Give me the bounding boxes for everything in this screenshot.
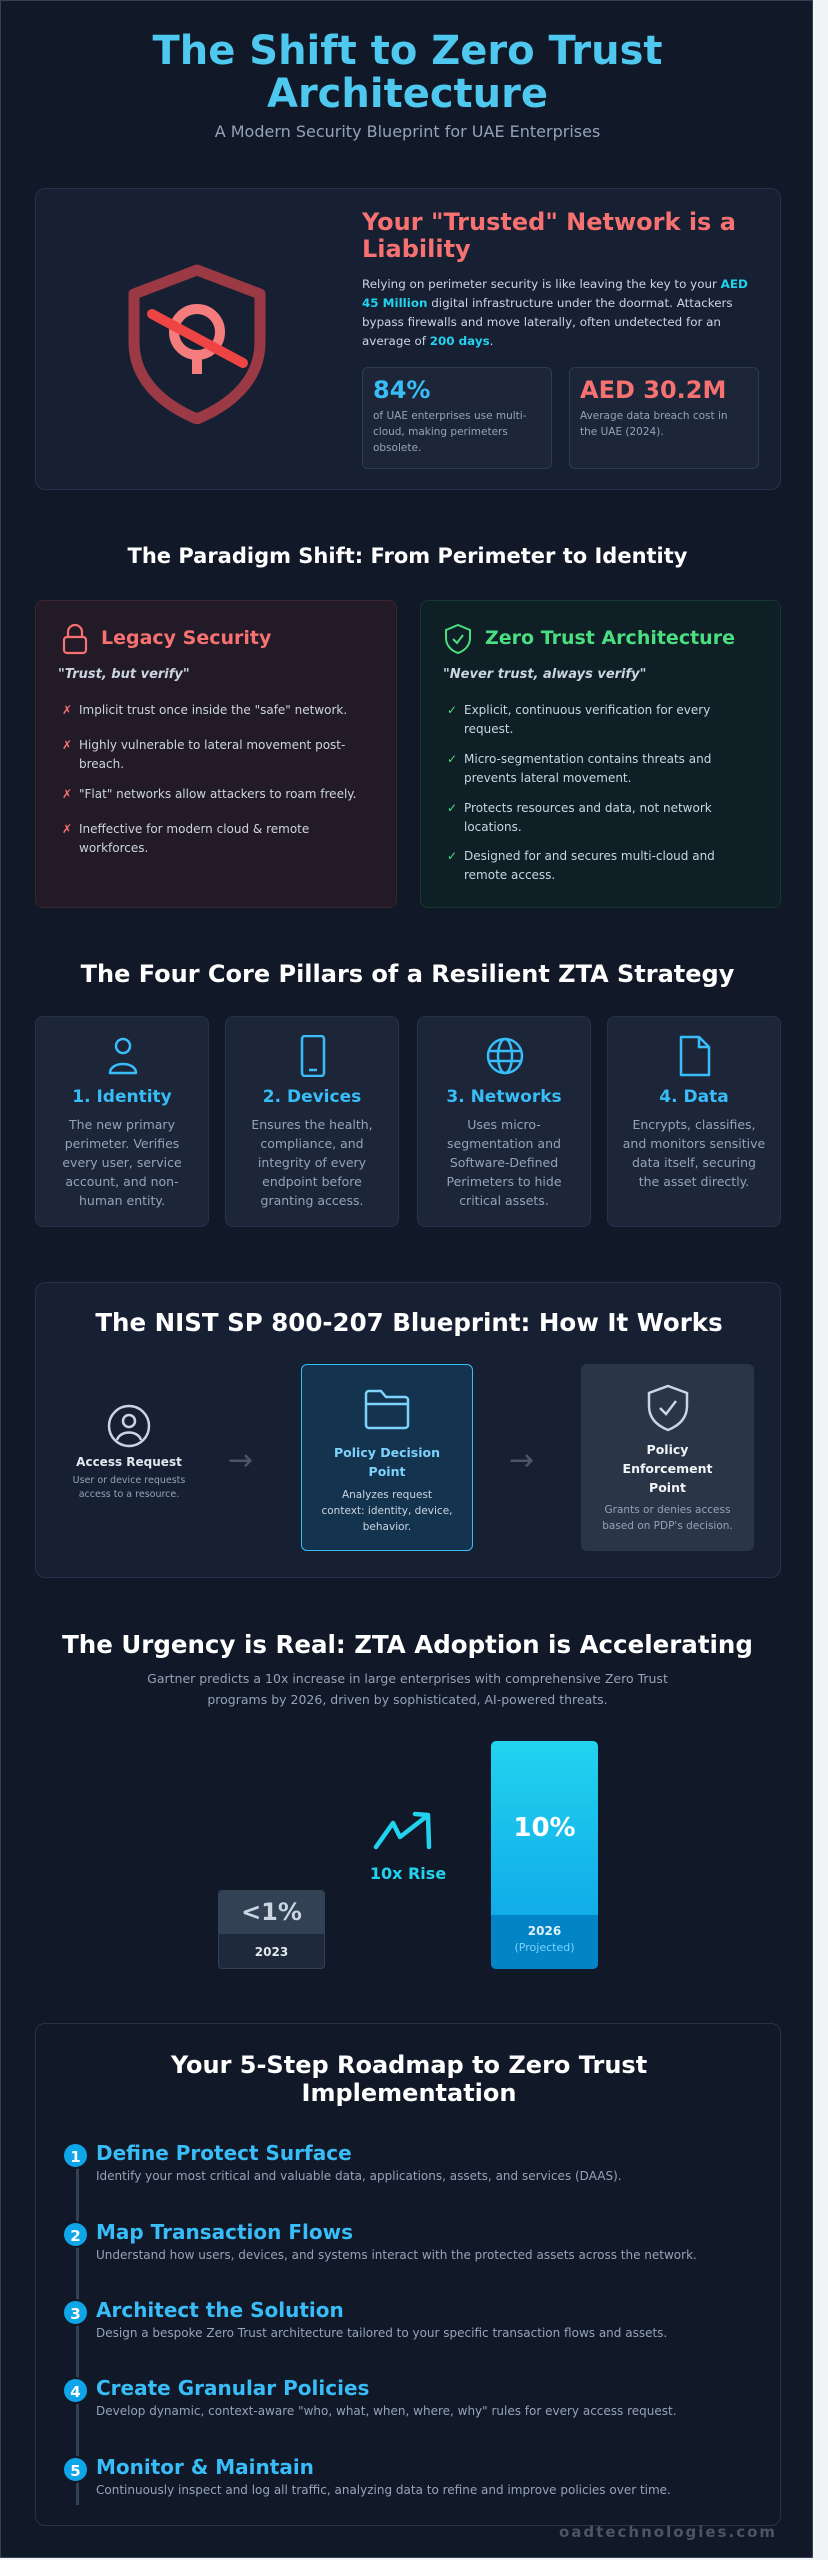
title: The Shift to Zero Trust: [152, 28, 663, 74]
panel: liability: [35, 188, 781, 490]
subtitle: A Modern Security Blueprint for UAE Enterprises: [215, 122, 600, 141]
icon: phone: [300, 1035, 326, 1077]
step 4: 4: [70, 2383, 81, 2401]
icon: broken shield key: [128, 264, 266, 424]
icon: user circle: [108, 1404, 150, 1448]
step: access request: User or device requests: [73, 1475, 185, 1486]
box: policy enforcement point: Grants or denies access: [605, 1504, 730, 1516]
icon: person: [108, 1038, 138, 1074]
step: access request: Access Request: [76, 1455, 182, 1469]
stat: 84%: 84%: [373, 376, 430, 404]
panel: roadmap: Define Protect Surface: [96, 2141, 352, 2165]
pillar: networks: 3. Networks: [446, 1087, 562, 1107]
step: access request: access to a resource.: [79, 1489, 179, 1500]
heading: urgency: The Urgency is Real: ZTA Adoption is Accelerating: [62, 1630, 753, 1659]
pillar: devices: Ensures the health, compliance, and integrity of every endpoint before granting access.: [251, 1117, 373, 1208]
label: 10x rise: 10x Rise: [370, 1864, 446, 1883]
box: policy decision point: Point: [369, 1464, 405, 1479]
pillar: identity: [35, 1016, 209, 1227]
heading: four pillars: The Four Core Pillars of a Resilient ZTA Strategy: [81, 960, 734, 988]
pillar: networks: Uses micro-segmentation and Software-Defined Perimeters to hide critical assets.: [446, 1117, 562, 1208]
panel: zero trust: Designed for and secures multi-cloud and remote access.: [464, 849, 715, 882]
box: policy decision point: context: identity, device,: [321, 1505, 452, 1517]
body text: Relying on perimeter security is like leaving the key to your AED 45 Million digital infrastructure under the doormat. Attackers bypass firewalls and move laterally, often undetected for an average of 200 days.: [362, 277, 748, 348]
arrow 2: →: [509, 1443, 534, 1478]
roadmap heading: [170, 2051, 647, 2107]
step 2: 2: [70, 2227, 81, 2245]
pillar: networks: [417, 1016, 591, 1227]
step 1: [64, 2141, 622, 2183]
bar: 2026: [491, 1741, 598, 1969]
panel: roadmap: [35, 2023, 781, 2526]
panel: legacy security: ✗: [62, 822, 72, 836]
pillar: identity: The new primary perimeter. Verifies every user, service account, and non-human entity.: [62, 1117, 182, 1208]
panel: roadmap: Architect the Solution: [96, 2298, 344, 2322]
bar: 2023: 2023: [255, 1945, 288, 1959]
step 2: Understand how users, devices, and systems interact with the protected assets across the network.: [96, 2248, 697, 2262]
icon: document: [680, 1036, 710, 1076]
pillar: data: [607, 1016, 781, 1227]
watermark: oadtechnologies.com: [559, 2523, 777, 2541]
bar: 2023: [218, 1890, 325, 1969]
roadmap heading: Implementation: [302, 2079, 516, 2107]
box: policy enforcement point: Point: [649, 1480, 686, 1495]
step 5: [64, 2455, 671, 2497]
panel: roadmap: Create Granular Policies: [96, 2376, 369, 2400]
panel: legacy security: Ineffective for modern cloud & remote workforces.: [79, 822, 309, 855]
box: policy enforcement point: based on PDP's decision.: [602, 1520, 733, 1532]
step 2: [64, 2220, 697, 2262]
panel: legacy security: Highly vulnerable to lateral movement post-breach.: [79, 738, 345, 771]
stat: AED 30.2M: Average data breach cost in the UAE (2024).: [580, 410, 728, 438]
panel: zero trust: ✓: [447, 849, 457, 863]
zt title: Zero Trust Architecture: [485, 627, 735, 649]
step 1: Identify your most critical and valuable data, applications, assets, and services (DAAS).: [96, 2169, 622, 2183]
box: policy enforcement point: Policy: [647, 1442, 688, 1457]
panel: legacy security: ✗: [62, 787, 72, 801]
icon: folder: [364, 1390, 410, 1430]
stat: AED 30.2M: AED 30.2M: [580, 376, 726, 404]
pillar: identity: 1. Identity: [72, 1087, 172, 1107]
step 5: 5: [70, 2462, 81, 2480]
panel: zero trust: [420, 600, 781, 908]
panel: legacy security: ✗: [62, 738, 72, 752]
step: access request: [73, 1404, 185, 1500]
panel: zero trust: Protects resources and data, not network locations.: [464, 801, 712, 834]
bar chart: [218, 1741, 598, 1969]
arrow 1: →: [228, 1443, 253, 1478]
title: [152, 28, 663, 117]
bar: 2026: (Projected): [515, 1941, 574, 1954]
icon: globe: [486, 1038, 524, 1074]
panel: zero trust: Micro-segmentation contains threats and prevents lateral movement.: [464, 752, 711, 785]
icon: shield check: [648, 1384, 688, 1432]
box: policy enforcement point: Enforcement: [623, 1461, 712, 1476]
icon: shield check: [445, 624, 471, 654]
heading: paradigm shift: The Paradigm Shift: From Perimeter to Identity: [128, 544, 688, 568]
step 3: 3: [70, 2305, 81, 2323]
stat: AED 30.2M: [569, 367, 759, 469]
pillar: data: Encrypts, classifies, and monitors sensitive data itself, securing the asset directly.: [623, 1117, 765, 1189]
NIST heading: The NIST SP 800-207 Blueprint: How It Works: [95, 1308, 723, 1337]
legacy quote: "Trust, but verify": [58, 667, 190, 682]
legacy bullets: ✗: [62, 703, 72, 717]
bar: 2026: 10%: [513, 1813, 576, 1843]
roadmap heading: Your 5-Step Roadmap to Zero Trust: [171, 2051, 647, 2079]
panel: roadmap: Map Transaction Flows: [96, 2220, 353, 2244]
box: policy decision point: Analyzes request: [342, 1489, 432, 1501]
urgency subtitle: Gartner predicts a 10x increase in large enterprises with comprehensive Zero Trust programs by 2026, driven by sophisticated, AI-powered threats.: [147, 1671, 668, 1707]
step 3: [64, 2298, 667, 2340]
pillar: devices: 2. Devices: [263, 1087, 361, 1107]
zt bullets: ✓: [447, 703, 457, 717]
heading: Your "Trusted" Network is a Liability: [362, 208, 736, 263]
legacy title: Legacy Security: [101, 627, 271, 649]
panel: legacy security: [35, 600, 397, 908]
zt quote: "Never trust, always verify": [443, 667, 646, 682]
step 1: 1: [70, 2148, 81, 2166]
bar: 2023: <1%: [241, 1898, 302, 1926]
title: Architecture: [267, 71, 548, 117]
box: policy decision point: behavior.: [363, 1521, 411, 1533]
zt bullets: Explicit, continuous verification for every request.: [464, 703, 710, 736]
step 4: [64, 2376, 677, 2418]
stat: 84%: [362, 367, 552, 469]
panel: zero trust: ✓: [447, 801, 457, 815]
icon: trend arrow: [374, 1812, 432, 1850]
panel: legacy security: "Flat" networks allow attackers to roam freely.: [79, 787, 356, 801]
box: policy decision point: [301, 1364, 473, 1551]
box: policy decision point: Policy Decision: [334, 1445, 440, 1460]
panel: zero trust: ✓: [447, 752, 457, 766]
step 5: Continuously inspect and log all traffic, analyzing data to refine and improve policies over time.: [96, 2483, 671, 2497]
step 3: Design a bespoke Zero Trust architecture tailored to your specific transaction flows and assets.: [96, 2326, 667, 2340]
pillar: data: 4. Data: [659, 1087, 729, 1107]
stat: 84%: of UAE enterprises use multi-cloud, making perimeters obsolete.: [373, 410, 526, 454]
panel: NIST blueprint: [35, 1282, 781, 1578]
bar: 2026: 2026: [528, 1924, 561, 1938]
panel: roadmap: Monitor & Maintain: [96, 2455, 314, 2479]
box: policy enforcement point: [581, 1364, 754, 1551]
pillar: devices: [225, 1016, 399, 1227]
legacy bullets: Implicit trust once inside the "safe" network.: [79, 703, 347, 717]
step 4: Develop dynamic, context-aware "who, what, when, where, why" rules for every access request.: [96, 2404, 677, 2418]
timeline line: [76, 2155, 79, 2505]
icon: lock: [62, 624, 88, 654]
